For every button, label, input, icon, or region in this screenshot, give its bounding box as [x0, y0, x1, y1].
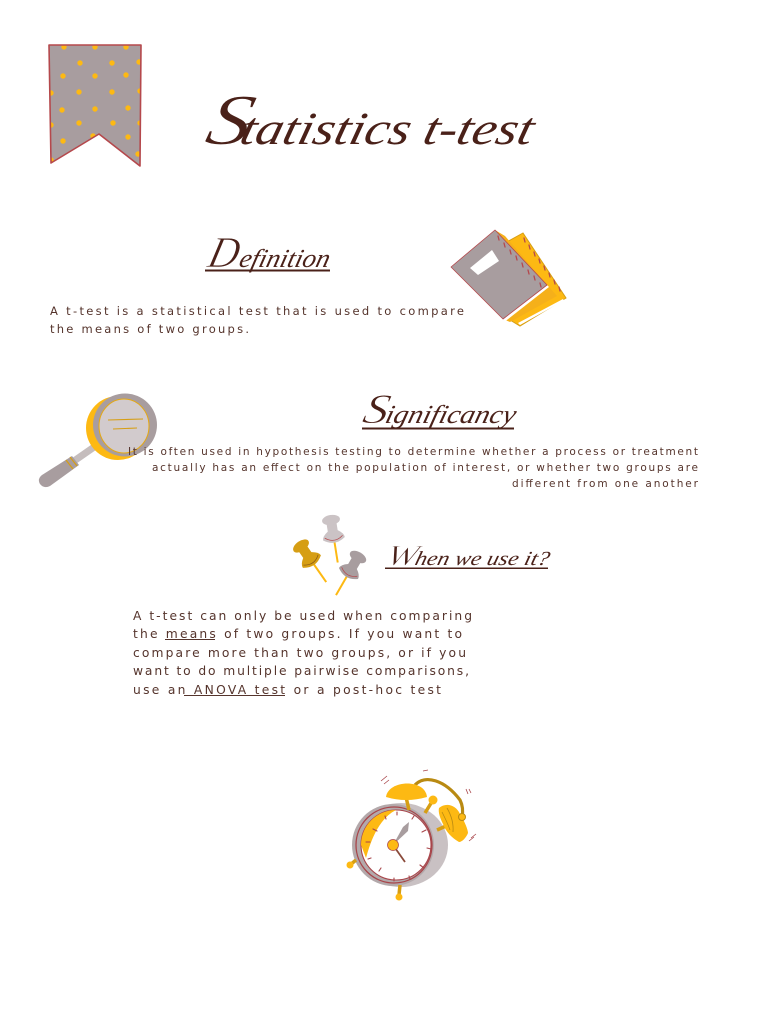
icon: alarm clock	[346, 770, 476, 900]
heading: Definition: efinition	[237, 243, 334, 273]
heading: Significancy	[359, 387, 520, 433]
text block: when to use	[133, 609, 472, 697]
text block: when to use: compare more than two groups, or if you	[133, 646, 466, 660]
text block: when to use: want to do multiple pairwise comparisons,	[133, 664, 469, 678]
icon: push pins	[289, 513, 370, 601]
text block: definition	[50, 304, 464, 336]
title: S	[199, 80, 263, 160]
text block: when to use: the means of two groups. If you want to	[133, 627, 462, 641]
icon: magnifying glass	[39, 394, 157, 487]
pin: gold	[289, 536, 335, 588]
text block: when to use: A t-test can only be used when comparing	[133, 609, 472, 623]
heading: When we use it?	[383, 540, 552, 572]
text block: definition: the means of two groups.	[50, 322, 249, 336]
pin: light grey	[319, 513, 349, 564]
text block: significancy	[128, 446, 699, 490]
icon: polka-dot bookmark ribbon	[48, 44, 143, 166]
heading: Definition: D	[203, 228, 246, 277]
heading: When we use it?: hen we use it?	[413, 548, 552, 570]
heading: Definition	[203, 228, 334, 277]
text block: significancy: different from one another	[512, 478, 699, 490]
heading: Significancy: S	[359, 387, 395, 433]
text block: significancy: actually has an effect on the population of interest, or whether two groups are	[152, 462, 698, 474]
heading: Significancy: ignificancy	[383, 399, 520, 429]
text block: when to use: use an ANOVA test or a post-hoc test	[133, 683, 441, 697]
title: tatistics t-test	[235, 104, 541, 155]
icon: spiral notebooks	[451, 230, 566, 326]
heading: When we use it?: W	[383, 540, 425, 572]
pin: grey	[326, 547, 370, 601]
infographic canvas	[38, 44, 698, 900]
title	[199, 80, 541, 160]
text block: definition: A t-test is a statistical test that is used to compare	[50, 304, 464, 318]
text block: significancy: It is often used in hypothesis testing to determine whether a process or treatment	[128, 446, 698, 458]
